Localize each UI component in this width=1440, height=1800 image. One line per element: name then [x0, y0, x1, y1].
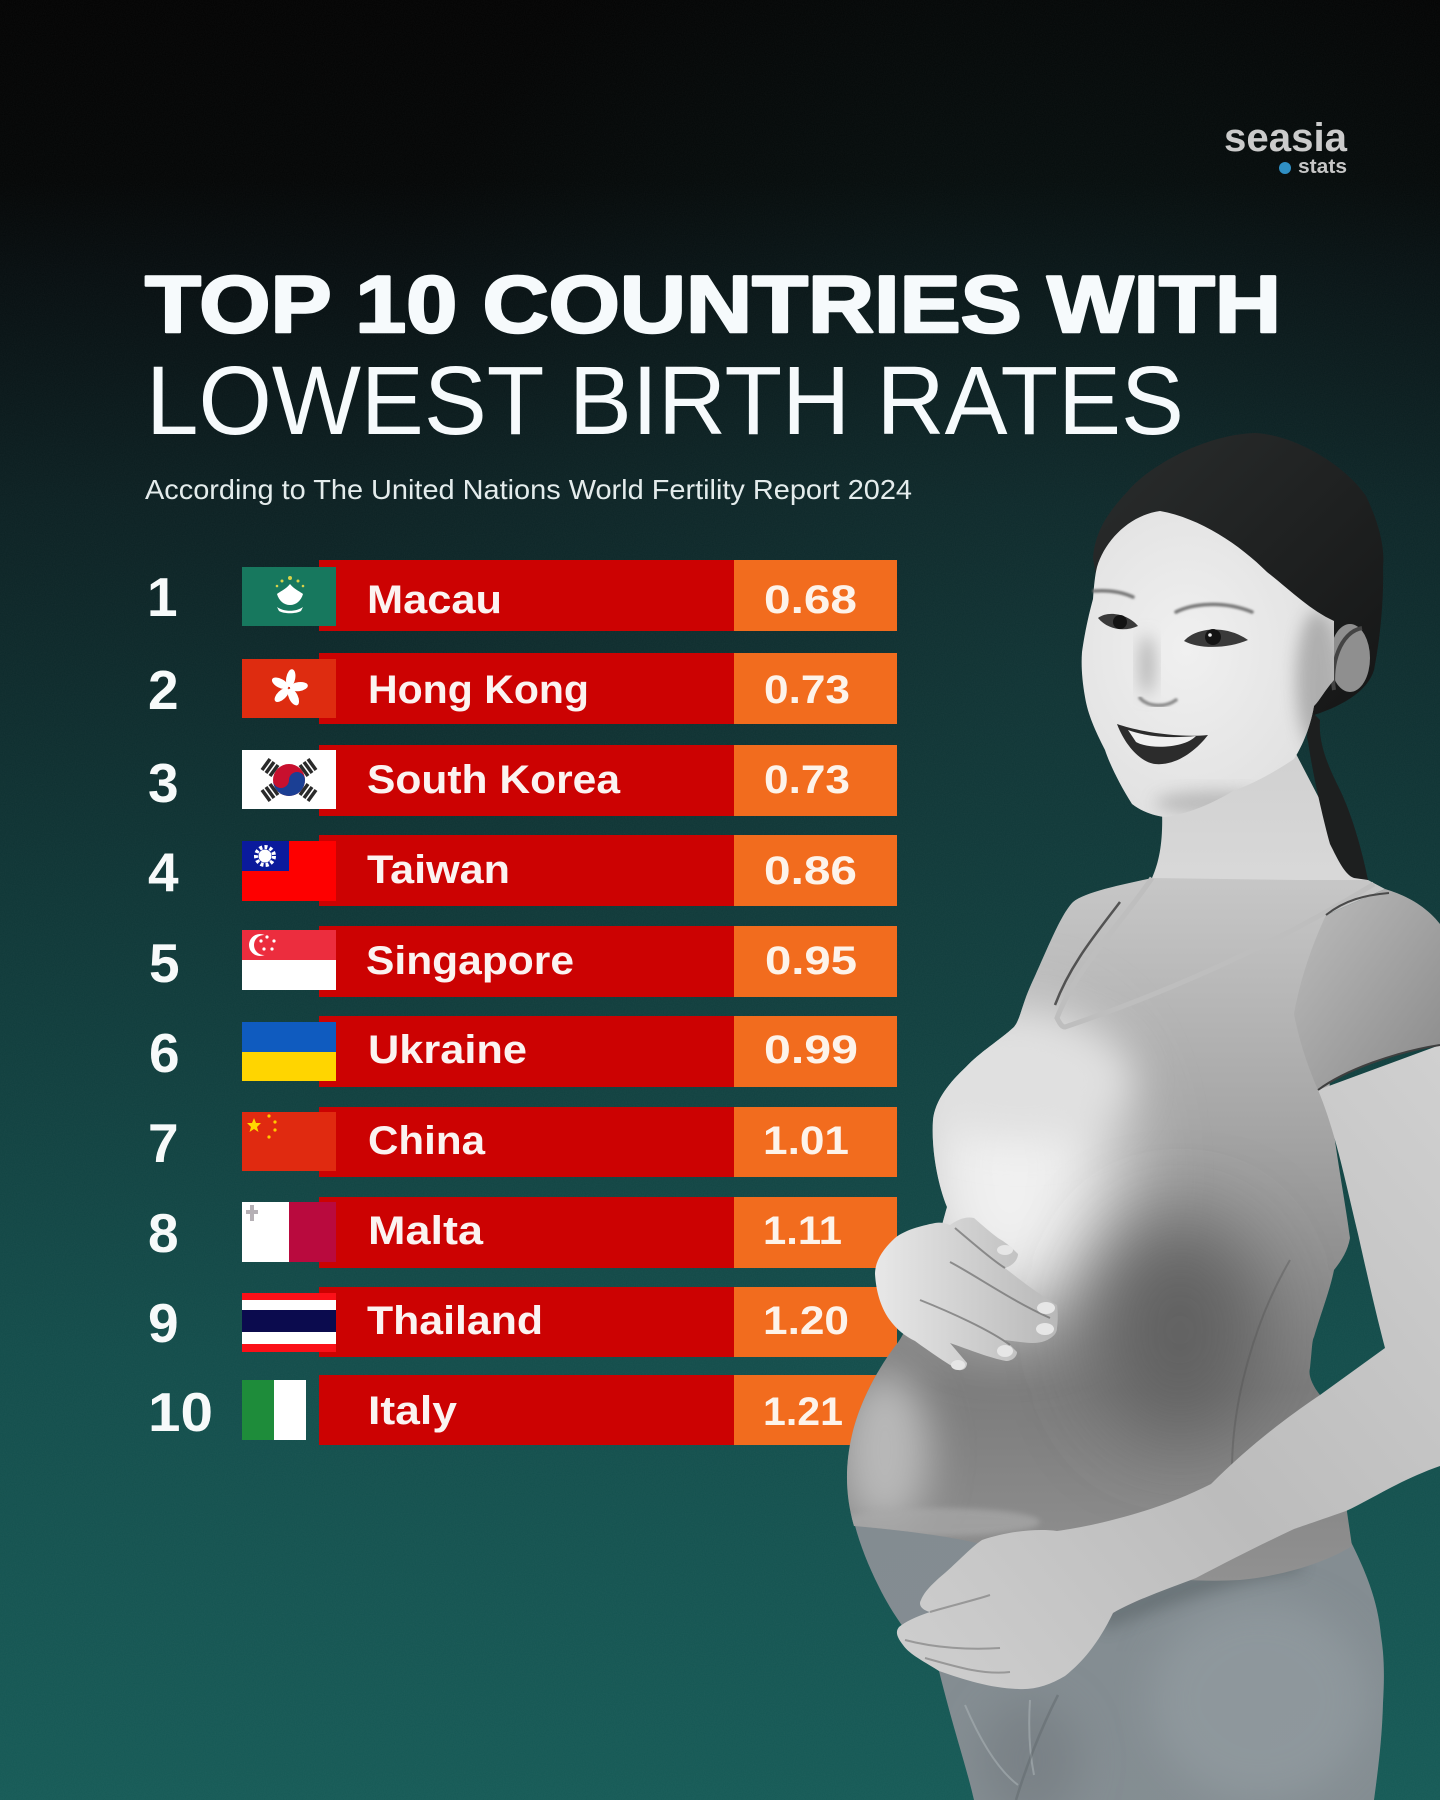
lower hand finger lines [905, 1595, 1010, 1673]
row 3: South Korea [148, 745, 897, 816]
row 7: China: China [368, 1119, 486, 1163]
row 5: Singapore [149, 926, 897, 997]
logo: seasia stats: stats [1298, 156, 1347, 178]
row 2: Hong Kong: 2 [148, 659, 179, 721]
neck and chest [1057, 750, 1374, 1027]
flag: Italy [242, 1380, 306, 1440]
row 1: Macau: Macau [367, 578, 502, 622]
row 6: Ukraine [149, 1016, 897, 1087]
row 2: Hong Kong: Hong Kong [368, 668, 589, 712]
eyebrows [1094, 591, 1252, 612]
shirt sleeve [1294, 889, 1440, 1090]
row 7: China: 7 [148, 1112, 179, 1174]
row 1: Macau: 0.68 [764, 578, 857, 622]
row 2: Hong Kong [148, 653, 897, 724]
row 10: Italy [148, 1375, 897, 1445]
flag: South Korea [242, 750, 336, 809]
row 5: Singapore: 5 [149, 932, 180, 994]
flag: Macau [242, 567, 336, 626]
hair [1093, 433, 1383, 715]
row 9: Thailand: Thailand [367, 1299, 543, 1343]
nose [1140, 698, 1176, 705]
row 10: Italy: 1.21 [763, 1390, 843, 1434]
row 3: South Korea: South Korea [367, 758, 621, 802]
face [1075, 505, 1340, 825]
row 9: Thailand: 9 [148, 1292, 179, 1354]
shirt neckline [1057, 878, 1374, 1027]
row 4: Taiwan [148, 835, 897, 906]
row 9: Thailand: 1.20 [763, 1299, 849, 1343]
shirt torso [840, 870, 1400, 1590]
upper hand on belly [875, 1217, 1058, 1370]
logo: seasia stats: seasia [1224, 116, 1348, 160]
title: LOWEST BIRTH RATES [146, 346, 1184, 455]
ear [1330, 624, 1370, 692]
row 1: Macau [147, 560, 897, 631]
row 8: Malta: 1.11 [763, 1209, 842, 1253]
upper arm and forearm [897, 1045, 1440, 1689]
flag: China [242, 1112, 336, 1171]
row 3: South Korea: 3 [148, 752, 179, 814]
illustration: pregnant woman [840, 433, 1440, 1800]
row 10: Italy: 10 [148, 1381, 213, 1443]
row 6: Ukraine: Ukraine [368, 1028, 527, 1072]
row 4: Taiwan: 4 [148, 841, 179, 903]
eyes [1098, 614, 1248, 647]
row 9: Thailand [148, 1287, 897, 1357]
mouth [1117, 724, 1208, 764]
row 8: Malta [148, 1197, 897, 1268]
row 8: Malta: 8 [148, 1202, 179, 1264]
row 3: South Korea: 0.73 [764, 758, 850, 802]
flag: Thailand [242, 1293, 336, 1352]
icon: blue globe dot [1279, 162, 1291, 174]
row 5: Singapore: Singapore [366, 939, 574, 983]
row 10: Italy: Italy [368, 1389, 458, 1433]
pants [855, 1526, 1384, 1800]
row 4: Taiwan: Taiwan [367, 848, 510, 892]
flag: Ukraine [242, 1022, 336, 1081]
row 6: Ukraine: 6 [149, 1022, 180, 1084]
row 2: Hong Kong: 0.73 [764, 668, 850, 712]
row 7: China: 1.01 [763, 1119, 849, 1163]
flag: Taiwan [242, 841, 336, 901]
row 6: Ukraine: 0.99 [764, 1028, 858, 1072]
row 8: Malta: Malta [368, 1209, 484, 1253]
row 7: China [148, 1107, 897, 1177]
flag: Singapore [242, 930, 336, 990]
row 5: Singapore: 0.95 [765, 939, 857, 983]
title [145, 260, 1281, 455]
flag: Hong Kong [242, 659, 336, 718]
flag: Malta [242, 1202, 336, 1262]
title: TOP 10 COUNTRIES WITH [145, 260, 1281, 350]
row 4: Taiwan: 0.86 [764, 849, 857, 893]
ponytail [1307, 712, 1368, 880]
row 1: Macau: 1 [147, 566, 178, 628]
subtitle: According to The United Nations World Fertility Report 2024 [145, 474, 912, 505]
